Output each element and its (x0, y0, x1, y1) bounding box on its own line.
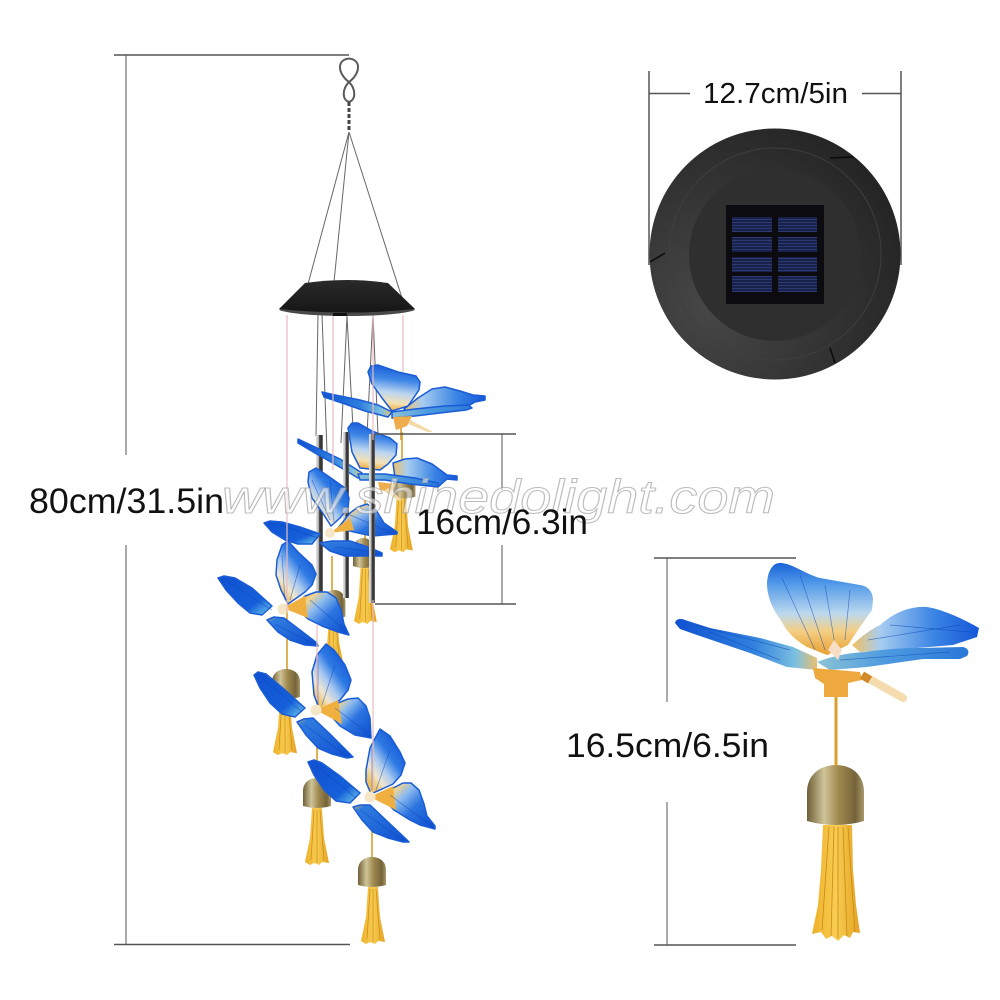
butterfly 4 (218, 541, 349, 646)
label: diameter: 12.7cm/5in (703, 78, 848, 110)
center glow (828, 640, 842, 660)
beaded tail (866, 677, 903, 698)
butterfly 2 (298, 423, 457, 501)
rod length dimension (375, 434, 516, 604)
rear chime rod (343, 432, 349, 598)
solar disc (650, 128, 900, 380)
chime rod front (369, 434, 375, 603)
butterfly 3 (264, 468, 397, 556)
wing veins (695, 575, 970, 660)
butterfly 1 (322, 365, 485, 440)
butterfly 6 (308, 729, 435, 842)
chime rod (316, 435, 323, 592)
label: overall height: 80cm/31.5in (29, 482, 224, 521)
top solar panel view (649, 71, 901, 380)
hanging wires (316, 314, 378, 452)
pink threads (287, 315, 403, 790)
diameter dimension (649, 71, 901, 265)
watermark: www.shinedolight.com (222, 470, 775, 523)
bells and tassels (272, 432, 415, 944)
right thin wing (817, 647, 968, 670)
solar canopy (279, 280, 415, 316)
hanger hook and cords (308, 58, 402, 298)
label: rod length: 16cm/6.3in (416, 503, 588, 542)
tassel (812, 825, 860, 941)
wind chime (218, 58, 485, 944)
butterfly 5 (254, 644, 371, 758)
brass bell (807, 765, 864, 825)
solar cell panel (726, 205, 824, 304)
lower left wing (675, 619, 817, 670)
body (813, 668, 862, 697)
single butterfly height dimension (566, 558, 796, 945)
string (834, 697, 838, 766)
label: butterfly height: 16.5cm/6.5in (566, 727, 769, 765)
large butterfly with bell (675, 563, 979, 941)
overall height dimension (29, 55, 350, 944)
right wing (852, 607, 979, 652)
upper wing (767, 563, 873, 655)
